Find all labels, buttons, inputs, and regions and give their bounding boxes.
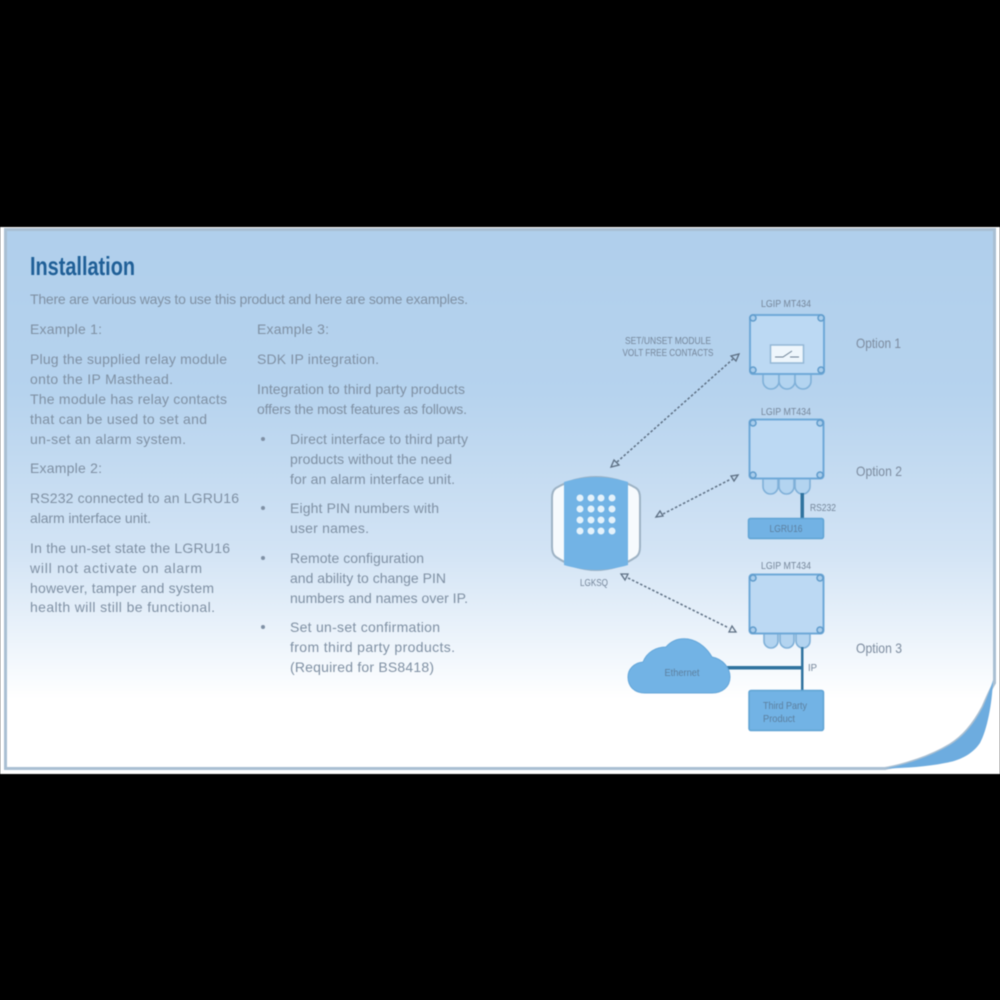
text column: examples 1 and 2: Example 1:	[30, 321, 102, 337]
text column: example 3: from third party products.	[290, 639, 455, 655]
option 1 device: LGIP MT434	[761, 299, 811, 310]
text column: example 3: for an alarm interface unit.	[290, 471, 455, 487]
third party product box: Third Party	[763, 700, 808, 712]
cloud: Ethernet	[628, 639, 730, 693]
third party product box	[749, 690, 824, 730]
arrow: keypad to option 3	[621, 574, 736, 632]
text column: examples 1 and 2: un-set an alarm system.	[30, 431, 186, 447]
third party product box: Product	[763, 713, 795, 725]
LGRU16 unit	[748, 518, 824, 538]
panel: installation background	[6, 230, 994, 768]
network cables	[726, 647, 804, 691]
text column: example 3	[257, 321, 468, 675]
text column: examples 1 and 2: Example 2:	[30, 460, 102, 476]
text column: examples 1 and 2: will not activate on alarm	[29, 560, 202, 576]
set/unset label: SET/UNSET MODULE	[625, 336, 711, 347]
LGRU16 unit: LGRU16	[770, 524, 803, 535]
text column: example 3: Direct interface to third party	[290, 431, 468, 447]
arrow: keypad to option 1	[611, 354, 739, 467]
text column: example 3: Eight PIN numbers with	[290, 500, 439, 516]
option 3 label: Option 3	[856, 640, 902, 656]
option 3 device	[750, 561, 824, 648]
keypad label: LGKSQ	[580, 578, 608, 589]
text column: examples 1 and 2: health will still be functional.	[30, 599, 215, 615]
white backing band	[0, 227, 1000, 774]
title: Installation	[30, 251, 135, 281]
option 1 label: Option 1	[856, 335, 901, 351]
text column: example 3: Set un-set confirmation	[290, 619, 440, 635]
text column: examples 1 and 2	[29, 321, 239, 615]
text column: example 3: Remote configuration	[290, 550, 424, 566]
text column: examples 1 and 2: onto the IP Masthead.	[30, 371, 173, 387]
text column: examples 1 and 2: RS232 connected to an LGRU16	[30, 490, 239, 506]
text column: example 3: products without the need	[290, 451, 452, 467]
text column: example 3: Integration to third party products	[257, 381, 465, 397]
page curl corner	[885, 680, 993, 768]
set/unset label: VOLT FREE CONTACTS	[622, 348, 714, 359]
text column: examples 1 and 2: Plug the supplied relay module	[30, 351, 227, 367]
arrow: keypad to option 2	[656, 475, 738, 517]
text column: examples 1 and 2: however, tamper and system	[30, 580, 214, 596]
IP label: IP	[808, 663, 817, 674]
option 2 device: LGIP MT434	[761, 407, 811, 418]
RS232 cable	[800, 493, 804, 519]
text column: example 3: numbers and names over IP.	[290, 590, 468, 606]
cloud: Ethernet: Ethernet	[664, 668, 700, 679]
keypad LGKSQ	[552, 477, 640, 570]
text column: example 3: (Required for BS8418)	[290, 659, 434, 675]
RS232 label: RS232	[810, 503, 836, 514]
intro text: There are various ways to use this product and here are some examples.	[30, 291, 468, 307]
option 2 label: Option 2	[856, 463, 902, 479]
text column: example 3: offers the most features as follows.	[257, 401, 467, 417]
option 2 device	[750, 407, 824, 494]
text column: examples 1 and 2: In the un-set state the LGRU16	[30, 540, 230, 556]
text column: example 3: SDK IP integration.	[257, 351, 379, 367]
text column: example 3: Example 3:	[257, 321, 329, 337]
set/unset label	[622, 336, 714, 359]
option 3 device: LGIP MT434	[761, 561, 811, 572]
text column: example 3: and ability to change PIN	[290, 570, 446, 586]
option 1 device	[750, 299, 824, 389]
text column: examples 1 and 2: that can be used to set and	[30, 411, 207, 427]
text column: examples 1 and 2: alarm interface unit.	[30, 510, 151, 526]
text column: examples 1 and 2: The module has relay contacts	[30, 391, 227, 407]
text column: example 3: user names.	[290, 520, 369, 536]
